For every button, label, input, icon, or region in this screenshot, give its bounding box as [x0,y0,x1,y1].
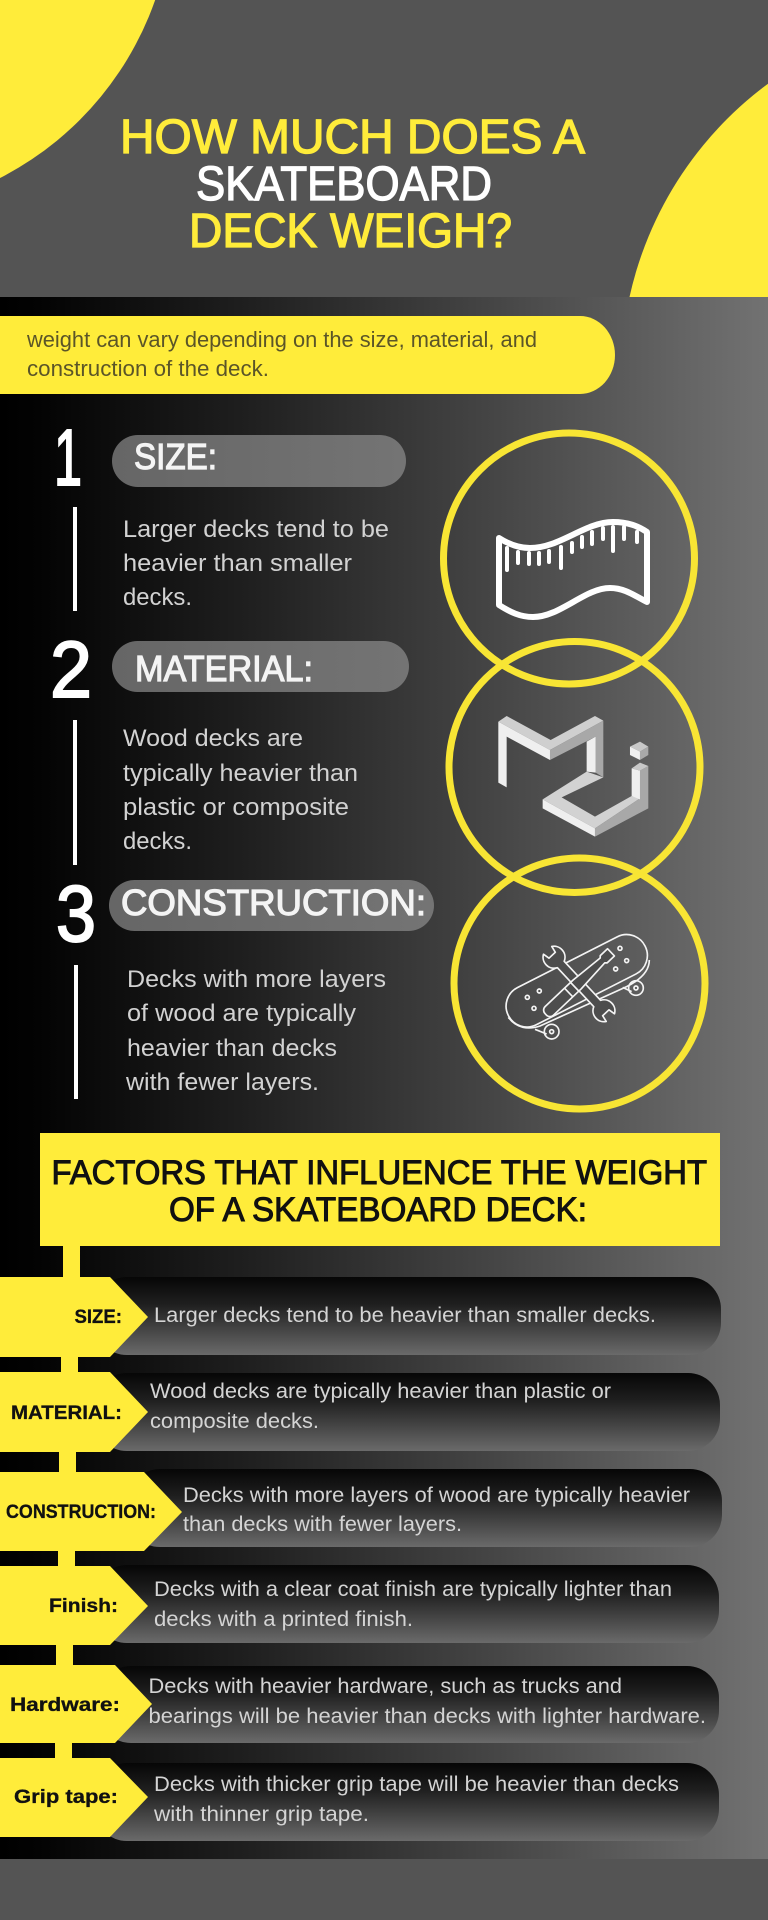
arrow tag: construction [0,1472,182,1551]
description: hardware [148,1675,706,1728]
intro callout: construction of the deck. [27,356,269,381]
description: construction: than decks with fewer layers. [183,1513,462,1536]
title: SKATEBOARD [196,158,492,211]
construction heading pill: CONSTRUCTION: [121,882,426,923]
size text: heavier than smaller [123,550,352,577]
item 2: material [50,625,409,865]
material heading pill: MATERIAL: [135,648,313,689]
number 1: 1 [54,413,82,502]
description: finish: Decks with a clear coat finish are typically lighter than [154,1578,672,1601]
intro callout: weight can vary depending on the size, material, and [26,327,537,352]
material text: decks. [123,828,192,855]
material heading pill [112,641,409,692]
description: grip tape: Decks with thicker grip tape will be heavier than decks [154,1773,679,1796]
construction text: heavier than decks [127,1035,337,1062]
circle: size [444,433,694,684]
material text: Wood decks are [123,725,303,752]
size text: decks. [123,584,192,611]
factor row: hardware [0,1665,719,1743]
material text: typically heavier than [123,760,358,787]
arrow tag: grip tape [0,1758,148,1837]
icon: measuring tape [499,522,647,617]
description: material: Wood decks are typically heavier than plastic or [150,1380,611,1403]
label: material: MATERIAL: [11,1403,122,1424]
size text: Larger decks tend to be [123,516,389,543]
label: construction: CONSTRUCTION: [6,1502,156,1523]
circle: construction [454,858,705,1109]
description: material [150,1380,611,1433]
decorative yellow circle: right [630,84,768,297]
size heading pill [112,435,406,487]
description: size: Larger decks tend to be heavier than smaller decks. [154,1304,656,1327]
description: grip tape [153,1773,679,1826]
factor row: grip tape [0,1758,719,1841]
label: size: SIZE: [74,1307,122,1328]
section heading box: FACTORS THAT INFLUENCE THE WEIGHT [52,1154,707,1192]
title [120,111,585,258]
material text [123,725,358,855]
description: hardware: bearings will be heavier than decks with lighter hardware. [148,1705,706,1728]
construction text: of wood are typically [127,1000,356,1027]
icon: skateboard and tools [499,927,654,1039]
size text [123,516,389,611]
factor row: material [0,1372,720,1452]
number 2: 2 [50,625,92,714]
section heading box [40,1133,720,1246]
factor row: finish [0,1565,719,1645]
construction text: with fewer layers. [125,1069,319,1096]
label: grip tape: Grip tape: [14,1787,118,1808]
description: finish: decks with a printed finish. [154,1608,413,1631]
vertical rule 1 [73,507,77,611]
yellow spine connectors [55,1246,80,1759]
title: HOW MUCH DOES A [120,111,585,164]
section heading box: OF A SKATEBOARD DECK: [169,1191,587,1229]
label: hardware: Hardware: [10,1695,120,1716]
description: hardware: Decks with heavier hardware, such as trucks and [148,1675,622,1698]
item 1: size [54,413,406,611]
description: finish [154,1578,672,1631]
arrow tag: material [0,1372,148,1452]
label: finish: Finish: [49,1596,118,1617]
circle: material [449,642,700,892]
arrow tag: hardware [0,1665,152,1743]
size heading pill: SIZE: [134,436,217,477]
icon: material design isometric logo [498,716,648,837]
number 3: 3 [56,869,96,958]
decorative yellow circle: top left [0,0,173,213]
intro callout [0,316,615,394]
factor row: size [0,1277,721,1357]
description: construction [183,1484,690,1536]
header panel [0,0,768,297]
description: construction: Decks with more layers of wood are typically heavier [183,1484,690,1507]
description: grip tape: with thinner grip tape. [153,1803,369,1826]
arrow tag: size [0,1277,148,1357]
item 3: construction [56,869,434,1099]
vertical rule 3 [74,965,78,1099]
title: DECK WEIGH? [189,205,512,258]
arrow tag: finish [0,1566,148,1645]
factor row: construction [0,1469,722,1551]
material text: plastic or composite [123,794,349,821]
vertical rule 2 [73,720,77,865]
description: material: composite decks. [150,1410,319,1433]
construction text [125,966,386,1096]
construction text: Decks with more layers [127,966,386,993]
